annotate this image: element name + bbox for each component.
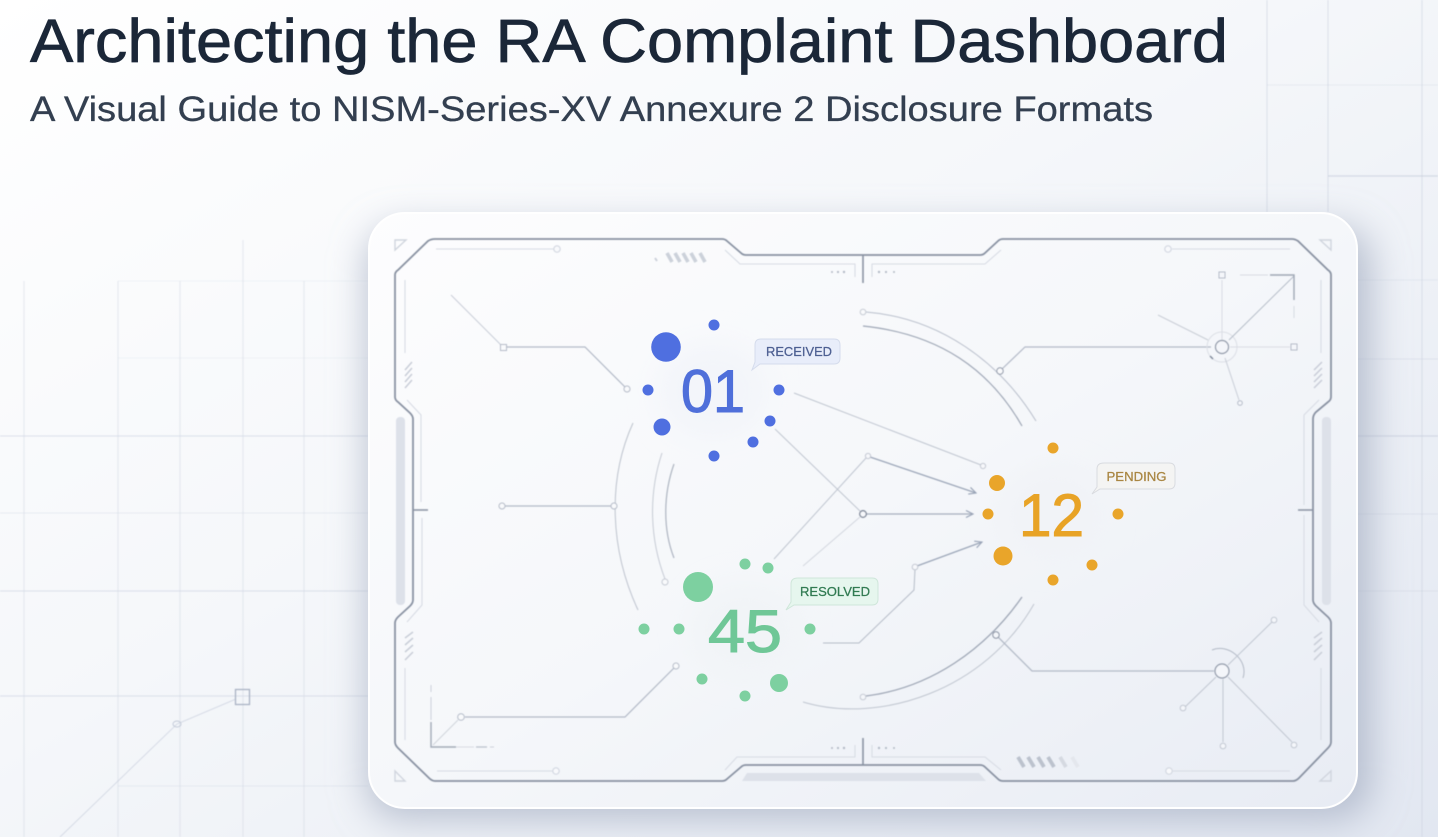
frame dots [831,271,895,749]
frame inner thin lines [405,249,1321,771]
cluster: pending [982,442,1175,586]
background node trace [60,690,250,837]
circuit traces [431,272,1297,749]
dots: received [642,320,784,462]
cluster: resolved [638,558,878,702]
frame nodes [553,246,1172,774]
bottom hatch strip [1018,757,1078,767]
background grid right [1267,0,1438,837]
dashboard frame [395,239,1331,781]
frame hatches [405,362,1322,660]
subtitle: A Visual Guide to NISM-Series-XV Annexure 2 Disclosure Formats [30,90,1153,129]
frame centre ticks [413,255,1313,765]
dots: resolved [638,558,816,702]
network node: top right [1158,272,1297,405]
tag: resolved: RESOLVED [800,585,870,599]
centre connectors and arrows [774,393,986,643]
tag: pending [1092,463,1175,494]
trace: bottom left [431,663,679,747]
number: 01: 01 [681,358,745,425]
trace: top left [451,295,630,392]
number: 12: 12 [1019,482,1084,549]
network node: bottom right [1180,617,1297,749]
tag: received: RECEIVED [766,345,832,359]
frame side bars [396,417,1331,781]
frame corner triangles [395,240,1331,781]
tag: pending: PENDING [1106,470,1166,484]
trace: top right arcs [860,309,1211,426]
top hatch strip [655,253,705,262]
cluster: received [642,320,840,462]
card shadow [366,226,1372,820]
trace: bottom right arcs [803,597,1214,709]
background grid left [0,240,368,837]
tag: resolved [786,578,878,610]
tag: received [752,339,840,370]
dots: pending [982,442,1124,586]
number: 45: 45 [708,598,782,665]
dashboard card [369,213,1357,808]
title: Architecting the RA Complaint Dashboard [30,7,1228,75]
trace: left arcs [499,423,674,610]
